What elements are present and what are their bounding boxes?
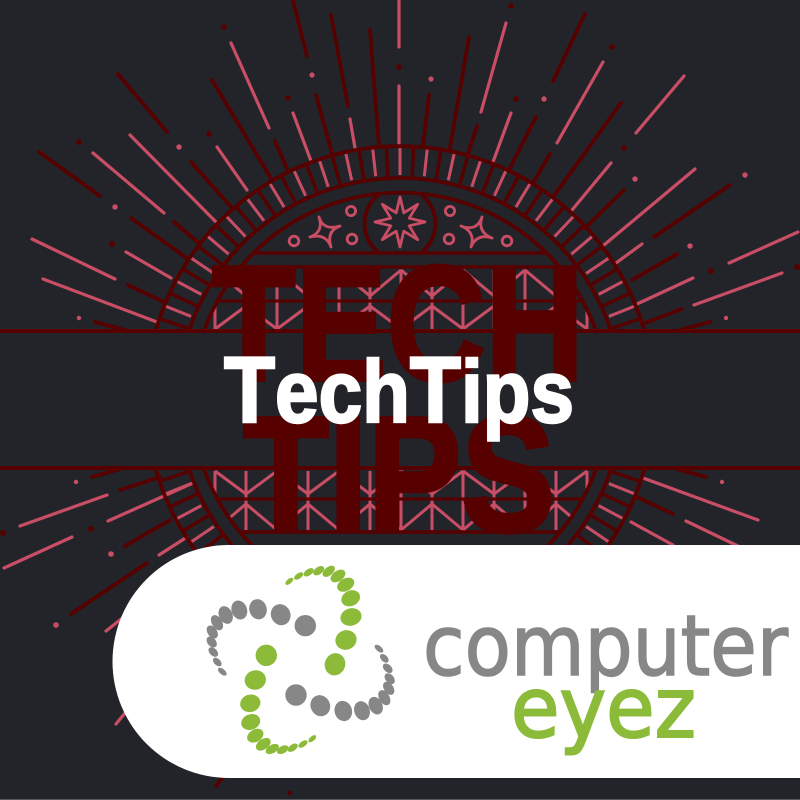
sunburst rays: lower — [0, 469, 758, 795]
sunburst rays: upper — [32, 0, 800, 330]
heading backdrop: TECH: TECH — [212, 232, 584, 415]
heading backdrop: TIPS: TIPS — [243, 383, 555, 566]
concentric arcs and horizontal rules — [0, 146, 800, 654]
medallion with eight-point star — [365, 195, 435, 252]
logo word: eyez: eyez — [511, 659, 696, 757]
sparkles and small circles — [289, 206, 512, 247]
title: TechTips: TechTips — [224, 337, 574, 442]
ring tick marks — [159, 146, 641, 654]
lattice pattern bands — [215, 270, 587, 530]
bottom edge line — [0, 799, 800, 800]
gray lower arc — [286, 644, 396, 722]
panel: white logo banner — [112, 545, 800, 778]
green upper arc — [285, 564, 363, 677]
green lower arc — [239, 645, 316, 755]
gray upper arc — [205, 598, 315, 676]
icon: company logo swirl — [205, 564, 396, 755]
